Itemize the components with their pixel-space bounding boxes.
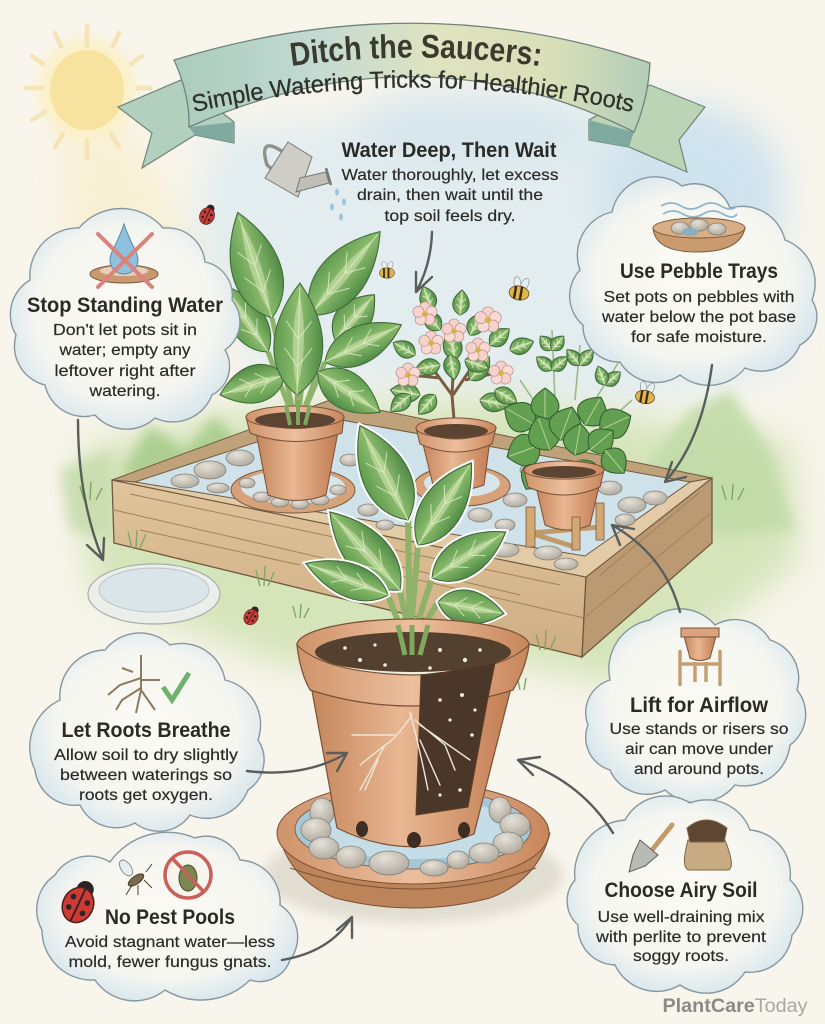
icon: trowel	[629, 825, 672, 872]
body text: mold, fewer fungus gnats.	[68, 954, 272, 971]
panel: use pebble trays	[570, 177, 817, 385]
body text	[610, 721, 789, 778]
body text	[595, 909, 767, 965]
body text: Water thoroughly, let excess	[342, 167, 558, 184]
icon: crossed-out drop in saucer	[90, 224, 158, 287]
heading: Let Roots Breathe	[62, 718, 231, 742]
soil top	[315, 632, 511, 672]
heading: Stop Standing Water	[27, 293, 224, 317]
bee right	[634, 380, 657, 405]
panel: lift for airflow	[586, 609, 806, 803]
terracotta pot on wooden stand	[524, 461, 604, 550]
body text: drain, then wait until the	[357, 187, 543, 204]
panel: water deep then wait	[265, 138, 558, 225]
body text: Allow soil to dry slightly	[54, 747, 238, 764]
body text: and around pots.	[634, 761, 764, 778]
pot body	[310, 680, 513, 847]
heading: Lift for Airflow	[630, 693, 768, 717]
banner tail right	[589, 85, 705, 172]
body text: water below the pot base	[601, 309, 796, 326]
raised wooden bed	[112, 400, 712, 657]
body text: air can move under	[625, 741, 774, 758]
cloud	[586, 609, 806, 803]
panel: no pest pools	[37, 832, 298, 1001]
plant: variegated plant in left pot	[208, 205, 410, 428]
body text	[53, 322, 197, 400]
body text: top soil feels dry.	[384, 208, 516, 225]
icon: gnat	[117, 858, 152, 895]
heading: Use Pebble Trays	[620, 259, 778, 283]
arrow: let roots breathe	[247, 753, 347, 773]
body text: Don't let pots sit in	[53, 322, 197, 339]
icon: watering can	[265, 142, 346, 220]
body text	[601, 289, 796, 346]
rim white plant base shoots	[398, 625, 428, 655]
bed pebbles	[171, 450, 667, 570]
banner tail left	[118, 80, 234, 168]
heading: Water Deep, Then Wait	[342, 138, 556, 162]
arrow: stop standing water	[78, 420, 104, 560]
icon: roots with check	[108, 655, 189, 713]
bee left	[380, 260, 394, 278]
ladybug near top	[197, 202, 219, 227]
background wash: garden ground	[80, 400, 800, 690]
loose empty saucer	[88, 564, 220, 624]
body text: Set pots on pebbles with	[604, 289, 794, 306]
heading: Choose Airy Soil	[604, 878, 758, 902]
body text	[54, 747, 238, 804]
terracotta pot: left	[246, 400, 344, 500]
icon: sun	[26, 26, 151, 158]
icon: pebble tray with waves	[653, 203, 745, 252]
body text: Avoid stagnant water—less	[65, 934, 275, 951]
heading: No Pest Pools	[105, 905, 235, 929]
foreground pot saucer	[263, 782, 563, 923]
subtitle: Simple Watering Tricks for Healthier Roots	[192, 70, 634, 112]
body text: for safe moisture.	[631, 329, 767, 346]
cloud	[570, 177, 817, 385]
bed interior with water	[112, 400, 712, 577]
cloud	[567, 796, 803, 993]
body text	[65, 934, 275, 971]
brand logo text: PlantCareToday	[662, 996, 808, 1017]
saucer: middle pot	[414, 466, 510, 506]
drainage holes	[356, 821, 470, 848]
bee centre	[508, 275, 532, 302]
icon: prohibited beetle	[165, 852, 211, 898]
pebbles in saucer	[301, 797, 530, 876]
grass tufts	[80, 482, 744, 690]
foreground plant leaves	[300, 415, 516, 640]
panel: choose airy soil	[567, 796, 803, 993]
panel: stop standing water	[10, 209, 240, 429]
icon: soil sack	[684, 820, 731, 870]
cloud	[30, 633, 264, 831]
arrow: choose airy soil	[518, 757, 613, 833]
panel: let roots breathe	[30, 633, 264, 831]
icon: ladybug	[57, 875, 103, 928]
icon: pot on stand	[680, 628, 720, 686]
plant: flowering shrub	[386, 284, 536, 432]
body text: with perlite to prevent	[595, 929, 767, 946]
stand back leg and crossbar	[530, 527, 600, 547]
body text	[342, 167, 558, 225]
banner ribbon	[174, 23, 650, 132]
foreground cutaway terracotta pot	[297, 619, 529, 848]
plant: herb sprigs and basil	[497, 330, 637, 500]
body text: Use well-draining mix	[598, 909, 764, 926]
body text: water; empty any	[58, 342, 190, 359]
body text: between waterings so	[60, 767, 232, 784]
body text: roots get oxygen.	[79, 787, 213, 804]
terracotta pot: middle	[416, 418, 496, 490]
arrow: pebble trays	[665, 365, 712, 482]
arrow: water deep	[416, 232, 432, 292]
bed front right face	[582, 478, 712, 657]
body text: watering.	[88, 383, 160, 400]
arrow: lift for airflow	[612, 525, 680, 612]
bed rim highlight	[112, 478, 712, 577]
cloud	[37, 832, 298, 1001]
title banner	[116, 22, 706, 173]
cloud	[10, 209, 240, 429]
saucer with pebbles: left pot	[231, 467, 355, 513]
garden background shrubs	[60, 390, 795, 540]
background wash: sky	[60, 90, 790, 410]
rim inner	[297, 619, 529, 671]
ladybug on lawn	[241, 604, 263, 627]
title heading: Ditch the Saucers:	[290, 34, 540, 66]
soil cutaway section	[416, 663, 495, 815]
body text: leftover right after	[54, 363, 196, 380]
body text: soggy roots.	[633, 948, 729, 965]
stand legs	[526, 503, 604, 550]
body text: Use stands or risers so	[610, 721, 789, 738]
arrow: no pest pools	[282, 917, 352, 960]
bed front left face	[112, 480, 586, 657]
rim band	[297, 645, 529, 706]
roots	[352, 712, 470, 790]
banner fold shadows	[189, 120, 634, 147]
